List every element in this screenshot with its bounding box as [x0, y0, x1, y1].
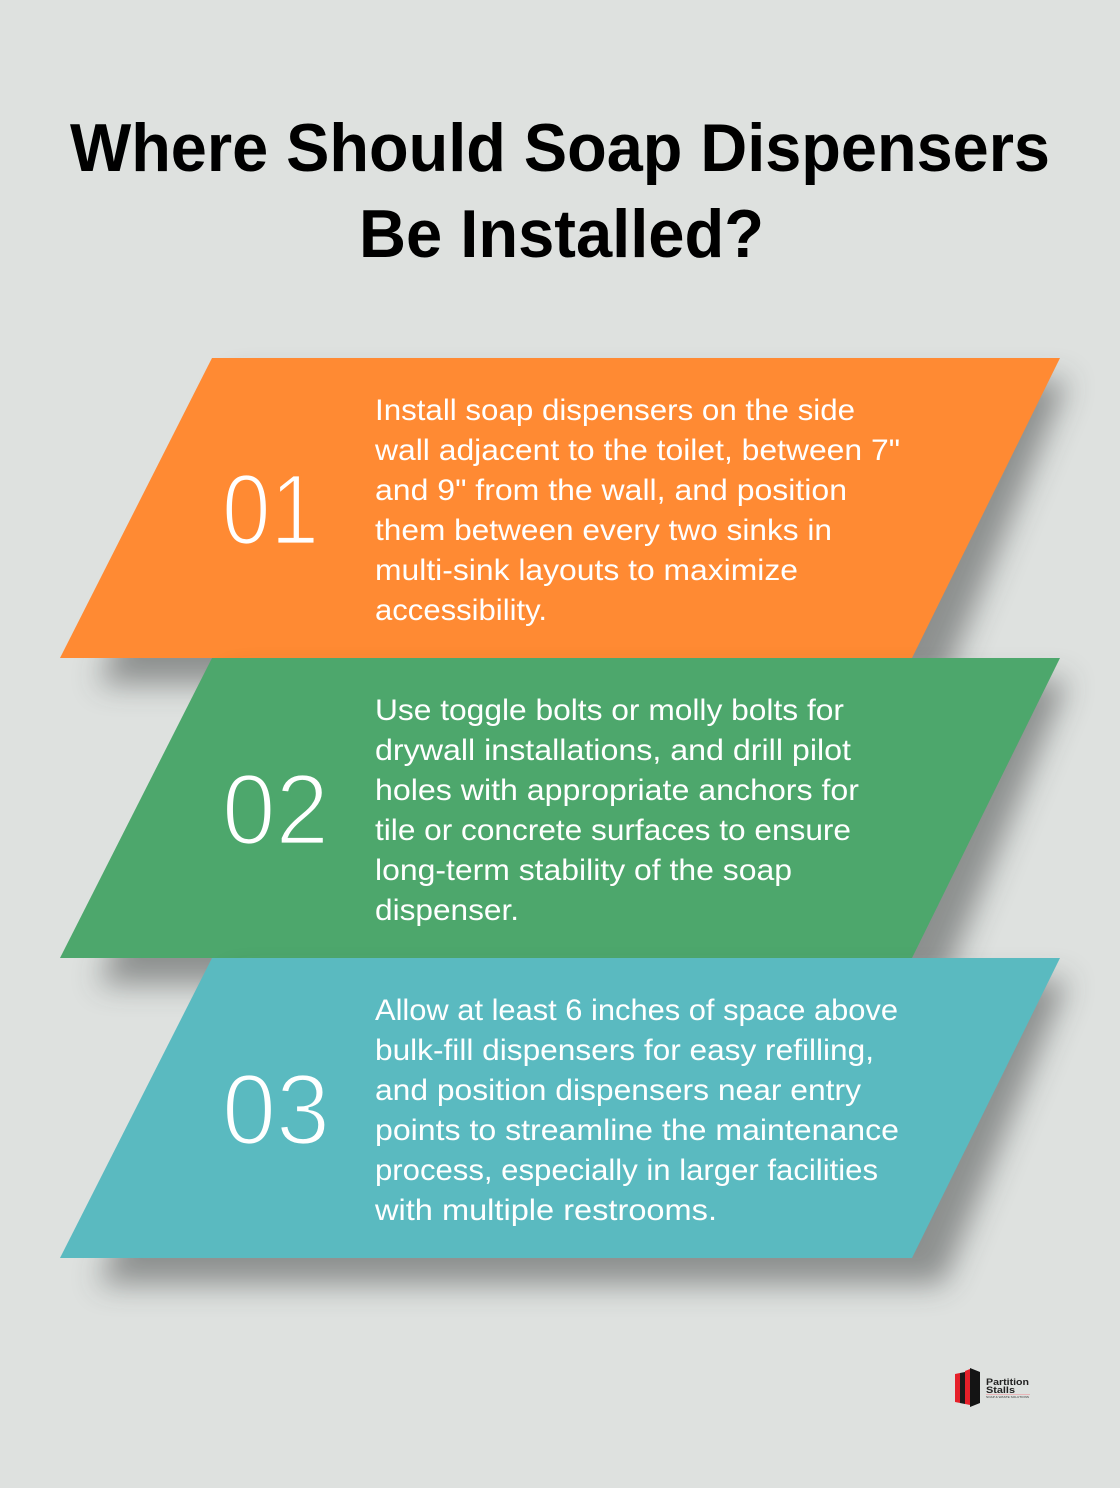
- text block 02: long-term stability of the soap: [375, 854, 792, 887]
- title: [70, 110, 1050, 272]
- logo: Partition Stalls: [955, 1368, 1030, 1407]
- text block 02: drywall installations, and drill pilot: [375, 734, 852, 767]
- text block 01: them between every two sinks in: [375, 514, 832, 547]
- panel: step 02: [60, 658, 1068, 984]
- logo wordmark: Stalls: [986, 1385, 1015, 1396]
- text block 03: process, especially in larger facilities: [375, 1154, 878, 1187]
- teal parallelogram: [60, 958, 1060, 1258]
- text block 01: Install soap dispensers on the side: [375, 394, 855, 427]
- text block 03: with multiple restrooms.: [374, 1194, 717, 1227]
- logo wordmark: Partition: [986, 1377, 1029, 1388]
- text block 01: multi-sink layouts to maximize: [375, 554, 798, 587]
- icon: stall panels: [955, 1368, 980, 1407]
- text block 01: and 9" from the wall, and position: [375, 474, 847, 507]
- number 02: 02: [222, 754, 329, 866]
- green parallelogram: [60, 658, 1060, 958]
- text block 01: wall adjacent to the toilet, between 7": [374, 434, 900, 467]
- text block 03: [374, 994, 899, 1227]
- panel: step 01: [60, 358, 1068, 684]
- text block 03: bulk-fill dispensers for easy refilling,: [375, 1034, 874, 1067]
- title: Where Should Soap Dispensers: [70, 110, 1050, 186]
- text block 01: [374, 394, 900, 627]
- orange parallelogram: [60, 358, 1060, 658]
- text block 03: Allow at least 6 inches of space above: [375, 994, 898, 1027]
- text block 03: and position dispensers near entry: [375, 1074, 861, 1107]
- text block 02: holes with appropriate anchors for: [375, 774, 859, 807]
- text block 02: [375, 694, 859, 927]
- logo wordmark: [986, 1377, 1030, 1399]
- text block 02: tile or concrete surfaces to ensure: [375, 814, 851, 847]
- number 03: 03: [222, 1054, 330, 1166]
- panel: step 03: [60, 958, 1068, 1284]
- text block 02: dispenser.: [375, 894, 519, 927]
- text block 02: Use toggle bolts or molly bolts for: [375, 694, 844, 727]
- title: Be Installed?: [359, 196, 764, 272]
- text block 01: accessibility.: [375, 594, 547, 627]
- number 01: 01: [222, 454, 319, 566]
- text block 03: points to streamline the maintenance: [375, 1114, 899, 1147]
- logo wordmark: SOAP & WASTE SOLUTIONS: [986, 1395, 1029, 1399]
